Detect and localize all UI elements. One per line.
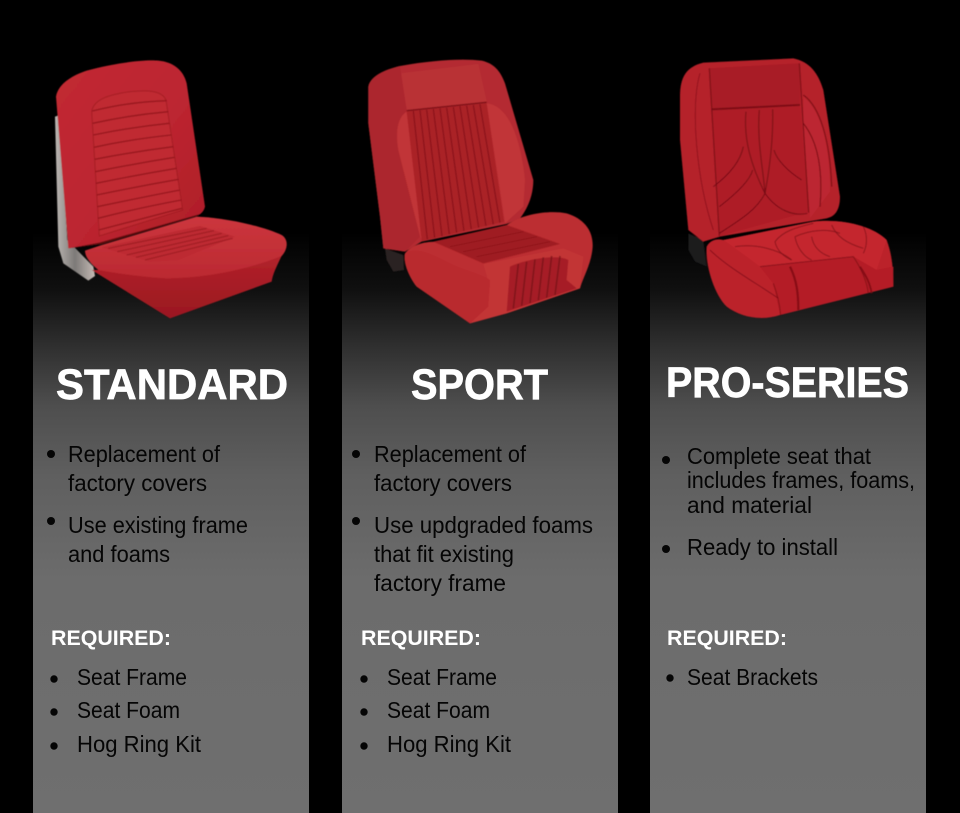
bullet list: pro-series features: includes frames, foams, [687,467,915,493]
bullet list: pro-series features: and material [687,492,812,518]
bullet list: pro-series features: Complete seat that [687,443,872,469]
panel: sport [342,60,618,813]
required heading: pro-series: REQUIRED: [667,627,787,650]
bullet list: sport features: factory covers [374,470,512,496]
required list: standard: Seat Frame [77,664,187,690]
required list: pro-series: Seat Brackets [687,664,818,690]
required list: standard: Hog Ring Kit [77,731,202,757]
bullet list: pro-series features [662,443,915,560]
bullet list: standard features: and foams [68,541,170,567]
required list: standard: Seat Foam [77,697,180,723]
icon: sport red seat [368,60,593,323]
required heading: standard: REQUIRED: [51,627,171,650]
bullet list: standard features: Replacement of [68,441,221,467]
bullet list: standard features: factory covers [68,470,207,496]
bullet list: sport features: factory frame [374,570,506,596]
bullet list: pro-series features: Ready to install [687,534,838,560]
icon: pro-series red seat [680,58,893,318]
bullet list: sport features [352,441,593,596]
bullet list: standard features: Use existing frame [68,512,248,538]
bullet list: sport features: Replacement of [374,441,527,467]
heading: sport: SPORT [411,361,548,409]
panel: pro-series [650,58,926,813]
required list: standard [50,664,202,757]
bullet list: sport features: that fit existing [374,541,514,567]
required list: sport: Seat Frame [387,664,497,690]
heading: pro-series: PRO-SERIES [666,359,909,407]
icon: standard red seat [55,60,287,318]
panel: standard [33,60,309,813]
required list: sport: Hog Ring Kit [387,731,512,757]
bullet list: standard features [47,441,248,567]
required heading: sport: REQUIRED: [361,627,481,650]
heading: standard: STANDARD [56,361,288,409]
required list: sport [360,664,512,757]
required list: sport: Seat Foam [387,697,490,723]
bullet list: sport features: Use updgraded foams [374,512,593,538]
